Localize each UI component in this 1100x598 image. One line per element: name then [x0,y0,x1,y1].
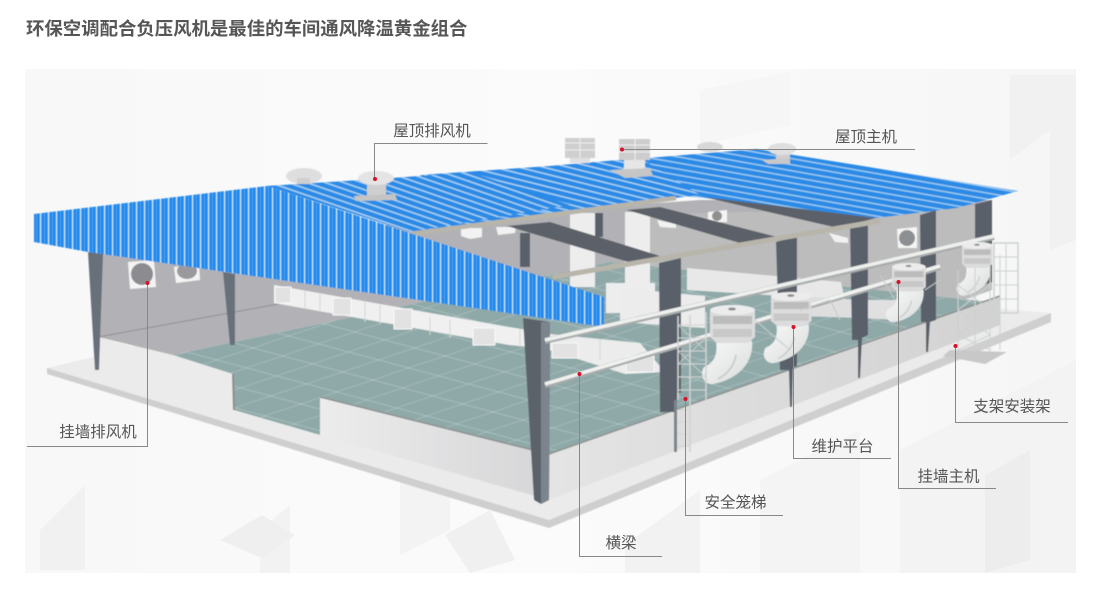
back walls [90,200,992,355]
right wall [549,296,1000,500]
side columns [88,200,992,412]
callout: 横梁: 横梁 [605,534,637,552]
callout: 屋顶排风机: 屋顶排风机 [393,122,471,140]
safety cage ladder [674,312,706,452]
floor tiles [173,262,990,454]
callout: 支架安装架 [954,344,1068,422]
light cross beams [410,198,880,277]
wall-hung main units [702,242,993,384]
callout: 挂墙排风机 [27,281,150,446]
callout: 安全笼梯 [684,397,783,516]
callout: 挂墙排风机: 挂墙排风机 [59,423,137,441]
corner column [523,318,550,504]
air distribution ducts [274,268,900,374]
vertical white ducts [570,212,655,313]
callout: 横梁 [578,372,662,556]
callout: 挂墙主机: 挂墙主机 [917,468,980,486]
wall-mounted exhaust fans [128,210,917,289]
rooftop main units [565,138,653,178]
rooftop exhaust fans [286,142,796,201]
callout: 支架安装架: 支架安装架 [973,398,1051,416]
concrete slab [47,300,1051,528]
left end wall [97,337,234,410]
front wall [320,397,549,500]
support frame tower [943,243,1018,364]
callout: 屋顶排风机 [373,122,488,181]
callout: 安全笼梯: 安全笼梯 [704,494,767,512]
roof surface [267,149,1018,232]
callout: 屋顶主机: 屋顶主机 [835,128,897,146]
dark roof beams [507,197,876,264]
callout: 屋顶主机 [620,128,915,152]
building illustration [34,138,1051,528]
maintenance platform brackets [755,275,940,350]
callout: 挂墙主机 [896,280,996,488]
title: 环保空调配合负压风机是最佳的车间通风降温黄金组合 [26,18,468,39]
callout: 维护平台 [792,325,891,458]
gable end of roof [34,186,604,327]
front support pipes [545,236,994,385]
callout: 维护平台: 维护平台 [811,438,874,456]
